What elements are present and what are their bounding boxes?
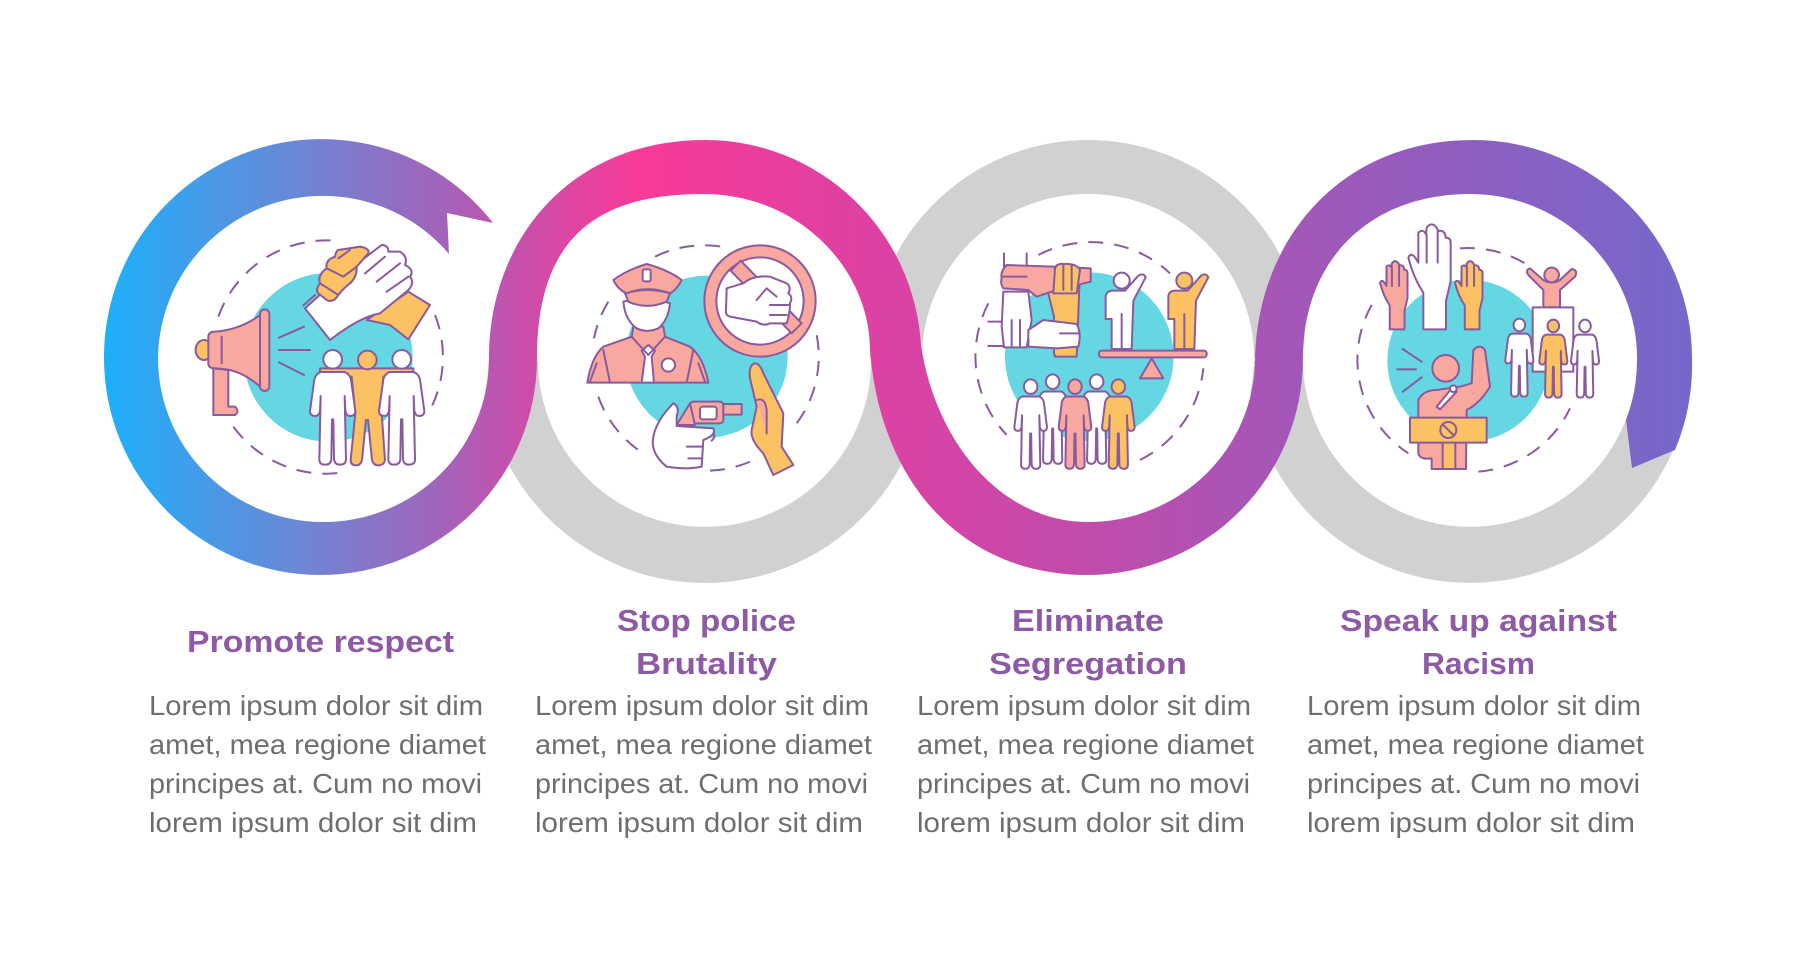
gray arc: step 4 lower half [1276, 361, 1664, 555]
dashed orbit [218, 240, 443, 474]
heading: Segregation [989, 646, 1187, 681]
heading [1340, 603, 1617, 681]
speaker at lectern [1397, 347, 1490, 469]
body: amet, mea regione diamet [149, 729, 486, 760]
three people [310, 350, 424, 465]
white disc: step 1 [158, 194, 488, 522]
body [535, 690, 872, 838]
gray arc: step 3 upper half [897, 167, 1279, 358]
balance with two people [1099, 273, 1208, 378]
white disc: step 4 [1303, 194, 1637, 526]
body: Lorem ipsum dolor sit dim [917, 690, 1251, 721]
heading: Racism [1422, 646, 1535, 681]
step 3 text [917, 603, 1254, 838]
gray arc: step 2 lower half [511, 361, 899, 555]
heading: Speak up against [1340, 603, 1617, 638]
body: Lorem ipsum dolor sit dim [535, 690, 869, 721]
body: lorem ipsum dolor sit dim [917, 807, 1245, 838]
teal backdrop [244, 273, 413, 442]
body [1307, 690, 1644, 838]
body: amet, mea regione diamet [535, 729, 872, 760]
dashed orbit [975, 242, 1203, 460]
megaphone [196, 309, 310, 415]
body: principes at. Cum no movi [917, 768, 1250, 799]
body: principes at. Cum no movi [535, 768, 868, 799]
body: principes at. Cum no movi [1307, 768, 1640, 799]
voters and podium figure [1505, 268, 1599, 398]
step 2 text [535, 603, 872, 838]
white disc: step 3 [922, 194, 1254, 522]
icon: step 3 segregation [975, 242, 1208, 469]
icon: step 2 police [587, 245, 819, 475]
icon: step 4 speak up [1357, 224, 1599, 472]
heading: Eliminate [1012, 603, 1164, 638]
dashed orbit [1357, 248, 1570, 472]
body: lorem ipsum dolor sit dim [149, 807, 477, 838]
teal backdrop [1387, 280, 1549, 442]
heading [989, 603, 1187, 681]
body: amet, mea regione diamet [917, 729, 1254, 760]
heading: Brutality [636, 646, 778, 681]
dashed orbit [594, 245, 819, 471]
heading: Stop police [617, 603, 796, 638]
body: amet, mea regione diamet [1307, 729, 1644, 760]
gradient ribbon arrow [104, 139, 1692, 575]
raised stop hand [750, 363, 793, 475]
body: Lorem ipsum dolor sit dim [1307, 690, 1641, 721]
crowd [1014, 374, 1135, 469]
step 4 text [1307, 603, 1644, 838]
no-violence sign [704, 245, 816, 357]
white disc: step 2 [538, 194, 870, 526]
teal backdrop [1005, 272, 1174, 441]
handshake [303, 245, 430, 340]
step 1 text [149, 624, 486, 838]
police officer [587, 264, 708, 383]
revolver in hand [653, 402, 742, 468]
body: lorem ipsum dolor sit dim [1307, 807, 1635, 838]
body [149, 690, 486, 838]
teal backdrop [626, 276, 788, 438]
heading: Promote respect [187, 624, 454, 659]
body: Lorem ipsum dolor sit dim [149, 690, 483, 721]
linked hands [988, 253, 1091, 357]
heading [617, 603, 796, 681]
body: lorem ipsum dolor sit dim [535, 807, 863, 838]
icon: step 1 respect [196, 240, 443, 474]
raised hands [1380, 224, 1483, 329]
body [917, 690, 1254, 838]
body: principes at. Cum no movi [149, 768, 482, 799]
